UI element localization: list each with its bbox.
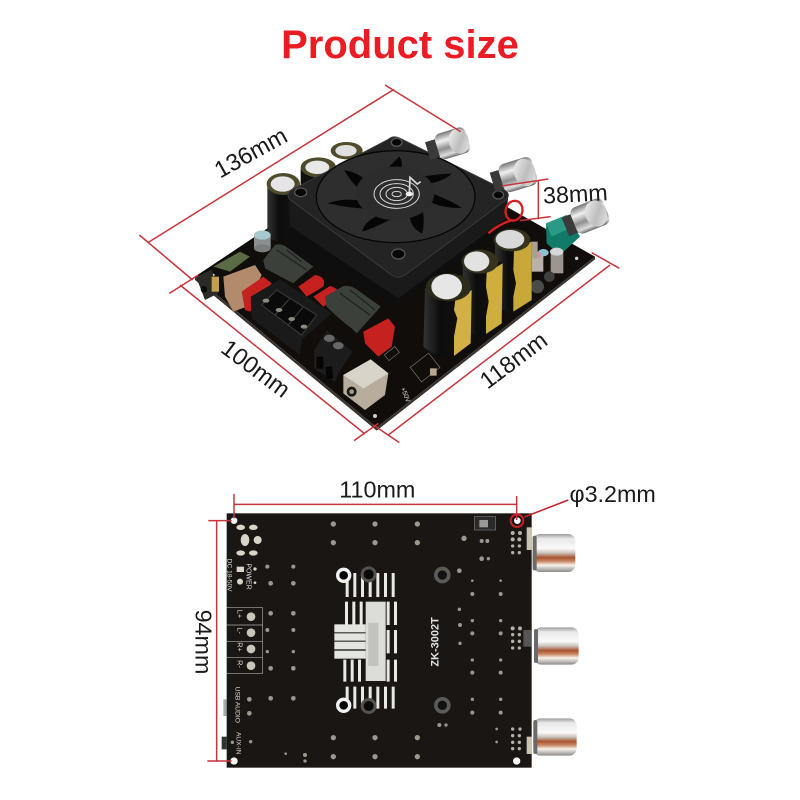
large gold-wrapped capacitor 1 [423,273,472,356]
dark inductor front [325,286,381,333]
title: Product size [281,23,519,67]
heatsink base under fan [287,180,503,303]
speaker terminal block [251,279,332,355]
rear capacitors [267,142,363,242]
label: hole diameter: φ3.2mm [569,481,656,507]
solder pad grid [231,521,503,763]
knob middle [534,627,579,665]
heatsink horizontal pads [334,624,366,659]
small teal capacitor [254,230,271,252]
silkscreen text: AUX-IN: AUX-IN [235,732,242,755]
dimension line: 110mm [234,494,517,520]
power screw terminal [314,331,353,382]
dimension line: 118mm [373,253,619,443]
dimension line: 100mm [169,275,378,441]
label: 100mm: 100mm [216,335,295,404]
fan blades [317,151,474,242]
side connectors [222,699,227,749]
silkscreen text: POWER: POWER [244,563,251,590]
speaker terminal silkscreen box: R- [235,660,244,668]
heatsink central strip [366,602,386,681]
USB connector [223,265,262,312]
red film capacitors [242,275,395,357]
speaker terminal silkscreen box: R+ [235,642,244,652]
board mounting holes and silk details: +50V [399,386,411,404]
solder pads left power section [236,525,262,585]
silver knob 1 [424,126,472,164]
label: 118mm: 118mm [476,327,553,395]
large gold-wrapped capacitor 3 [494,229,532,312]
label: 110mm: 110mm [339,476,415,502]
fan corner screws [295,138,504,259]
QC sticker [474,517,496,530]
fan housing top [288,137,508,277]
corner mounting holes [230,517,521,765]
silkscreen text: model number: ZK-3002T [430,617,442,667]
label: 136mm: 136mm [210,123,292,184]
dimension line: 94mm [207,520,232,762]
large gold-wrapped capacitor 2 [462,250,503,335]
green potentiometer [546,215,580,255]
dark inductor rear [263,244,313,283]
potentiometer pins [511,527,532,754]
silver knob 2 [488,155,539,196]
silkscreen text: DC 18-50V: DC 18-50V [226,559,233,592]
label: 38mm: 38mm [542,179,608,209]
board mounting holes and silk details [212,257,578,418]
green PCB detail [213,252,250,272]
fan housing side [288,195,508,298]
panel: underside photo with dimensions [190,476,656,768]
dimension line: 136mm [139,85,461,280]
panel: angled product photo with dimensions [139,85,619,443]
silkscreen text: USB AUDIO: USB AUDIO [233,687,240,723]
board front edge thickness [195,257,595,431]
dimension line: 38mm [502,179,551,221]
heatsink screw holes [336,566,451,714]
speaker terminal silkscreen box: L+ [235,610,244,618]
speaker terminal silkscreen box: L- [235,627,244,634]
heatsink contact pattern [343,585,398,698]
knob top [533,534,575,572]
knob bottom [533,718,577,756]
DC power jack [343,359,388,410]
fan hub with logo [356,167,434,220]
speaker terminal silkscreen box [227,608,263,673]
audio jack [196,270,219,300]
circuit board top view [195,163,595,427]
label: 94mm: 94mm [190,610,216,674]
silver knob 3 [560,196,611,239]
hole callout marker and leader [511,500,568,527]
fan opening [316,150,476,243]
heatsink via grid [368,623,378,666]
underside circuit board [227,513,532,768]
small electrolytic capacitors and chokes [528,242,563,293]
red fan wire loop [488,199,525,233]
